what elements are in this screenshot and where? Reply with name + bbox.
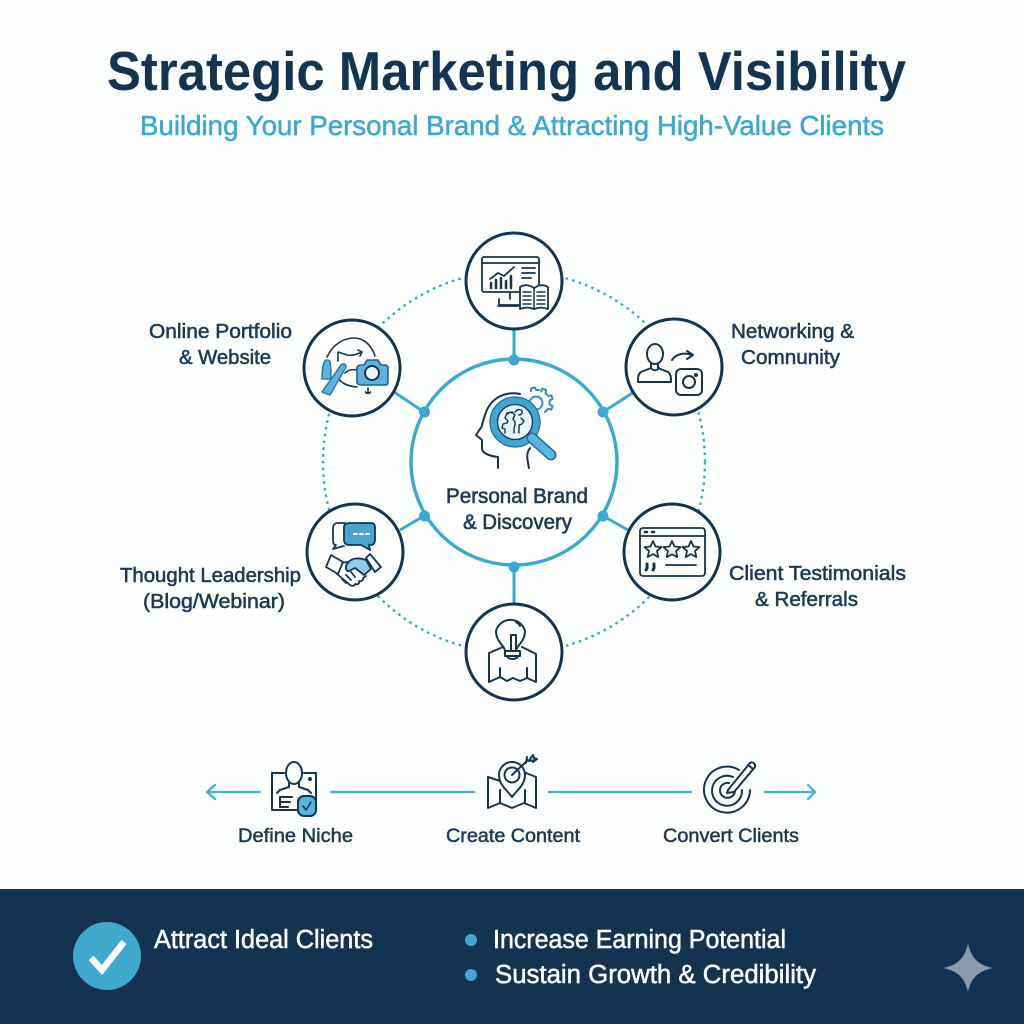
label: networking	[731, 320, 854, 369]
satellite: thought leadership speech and handshake	[307, 504, 403, 600]
icon: create content map pin target	[488, 755, 537, 808]
timeline arrows and lines	[207, 785, 815, 799]
icon: define niche profile	[272, 762, 316, 816]
label: client testimonials: & Referrals	[755, 588, 858, 611]
label: thought leadership: Thought Leadership	[120, 564, 301, 587]
label: networking: Networking &	[731, 320, 854, 343]
center label: & Discovery	[463, 511, 572, 534]
connectors	[394, 329, 634, 604]
timeline labels: Convert Clients	[663, 825, 799, 847]
satellite: client testimonials stars	[624, 504, 720, 600]
label: networking: Comnunity	[741, 346, 841, 369]
process timeline	[207, 755, 815, 847]
dotted outer ring	[323, 271, 705, 653]
label: thought leadership	[120, 564, 301, 613]
footer band	[0, 889, 1024, 1024]
bullet list	[465, 926, 816, 989]
icon: check badge	[73, 922, 141, 990]
center label: Personal Brand	[446, 485, 588, 508]
label: online portfolio: Online Portfolio	[149, 320, 292, 343]
subtitle: Building Your Personal Brand & Attracting High-Value Clients	[140, 110, 884, 141]
satellite: top analytics and book	[466, 233, 562, 329]
icon: convert clients target and pencil	[704, 762, 755, 813]
bullet list: Increase Earning Potential	[493, 926, 786, 954]
connector nodes	[419, 354, 608, 572]
satellite: bottom lightbulb over map	[466, 604, 562, 700]
center label	[446, 485, 588, 534]
hub diagram	[120, 233, 906, 700]
title: Strategic Marketing and Visibility	[107, 40, 906, 102]
benefit: attract ideal clients: Attract Ideal Clients	[154, 926, 373, 954]
timeline labels: Define Niche	[238, 825, 353, 847]
central circle	[411, 359, 617, 565]
timeline labels: Create Content	[446, 825, 581, 847]
label: client testimonials	[729, 562, 906, 611]
label: online portfolio: & Website	[179, 346, 271, 369]
label: online portfolio	[149, 320, 292, 369]
label: thought leadership: (Blog/Webinar)	[143, 590, 285, 613]
satellite: networking person and instagram	[626, 319, 722, 415]
timeline labels	[238, 825, 799, 847]
satellite: online portfolio camera	[304, 320, 400, 416]
icon: sparkle	[943, 943, 993, 992]
bullet list: Sustain Growth & Credibility	[495, 961, 816, 989]
icon: head with magnifier and gear	[476, 388, 552, 468]
label: client testimonials: Client Testimonials	[729, 562, 906, 585]
